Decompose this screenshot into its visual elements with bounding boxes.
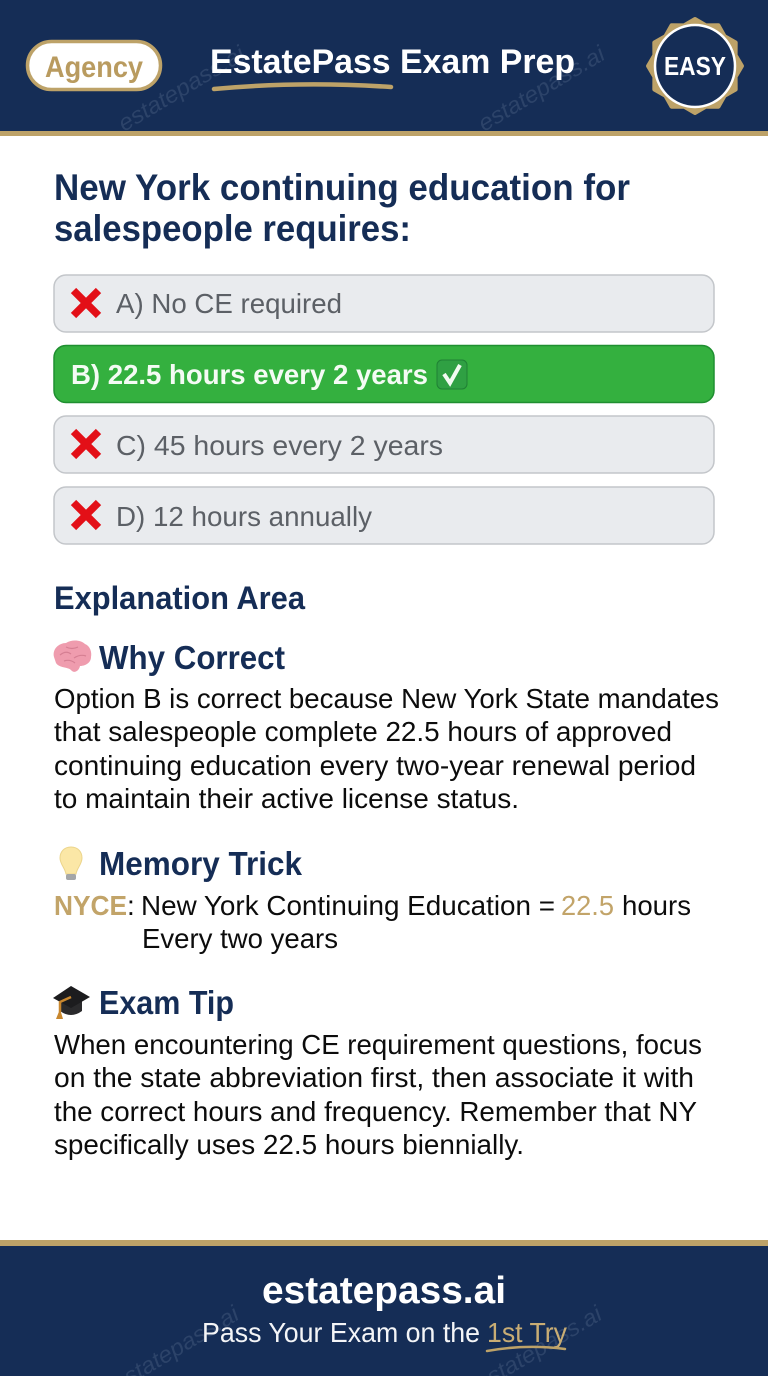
- header title: EstatePass Exam Prep: [210, 43, 575, 81]
- header band: [0, 0, 768, 136]
- section: exam tip: on the state abbreviation first, then associate it with: [54, 1062, 694, 1093]
- section: memory trick: New York Continuing Education =: [141, 890, 555, 921]
- question heading: New York continuing education for: [54, 167, 630, 208]
- section: exam tip: When encountering CE requirement questions, focus: [54, 1029, 702, 1060]
- option B: correct answer: B) 22.5 hours every 2 years: [71, 359, 428, 390]
- section: why correct: continuing education every two-year renewal period: [54, 750, 696, 781]
- question heading: salespeople requires:: [54, 208, 411, 249]
- option C: C) 45 hours every 2 years: [116, 430, 443, 461]
- section: memory trick: 22.5: [561, 890, 614, 921]
- section: why correct: to maintain their active license status.: [54, 783, 519, 814]
- footer band: [0, 1240, 768, 1376]
- badge: EASY difficulty seal: [648, 19, 742, 113]
- section: memory trick: Memory Trick: [99, 845, 303, 882]
- question heading: [54, 167, 630, 249]
- option C: [54, 416, 714, 473]
- option D: D) 12 hours annually: [116, 501, 372, 532]
- section: why correct: Why Correct: [99, 639, 285, 676]
- section: why correct: [54, 639, 719, 814]
- option A: [54, 275, 714, 332]
- section: exam tip: the correct hours and frequency. Remember that NY: [54, 1096, 697, 1127]
- badge: Agency: [28, 42, 160, 90]
- option B: correct answer: [54, 346, 714, 402]
- icon: graduation cap: [53, 986, 90, 1019]
- section: exam tip: specifically uses 22.5 hours biennially.: [54, 1129, 524, 1160]
- section: exam tip: Exam Tip: [99, 984, 234, 1021]
- section: exam tip: [53, 984, 702, 1160]
- badge: EASY difficulty seal: EASY: [664, 51, 726, 81]
- section: why correct: that salespeople complete 22.5 hours of approved: [54, 716, 672, 747]
- header band: estatepass.ai: [473, 40, 610, 136]
- footer brand: estatepass.ai: [262, 1270, 506, 1312]
- section: memory trick: :: [127, 890, 135, 921]
- explanation area heading: Explanation Area: [54, 580, 305, 616]
- option D: [54, 487, 714, 544]
- option A: A) No CE required: [116, 288, 342, 319]
- icon: light bulb: [60, 847, 82, 880]
- badge: Agency: Agency: [45, 51, 143, 84]
- section: why correct: Option B is correct because New York State mandates: [54, 683, 719, 714]
- header band: estatepass.ai: [113, 40, 250, 136]
- footer tagline: Pass Your Exam on the: [202, 1317, 480, 1348]
- footer tagline: 1st Try: [487, 1317, 567, 1348]
- icon: brain: [54, 640, 91, 672]
- section: memory trick: [54, 845, 691, 954]
- section: memory trick: Every two years: [142, 923, 338, 954]
- section: memory trick: NYCE: [54, 890, 127, 921]
- section: memory trick: hours: [622, 890, 691, 921]
